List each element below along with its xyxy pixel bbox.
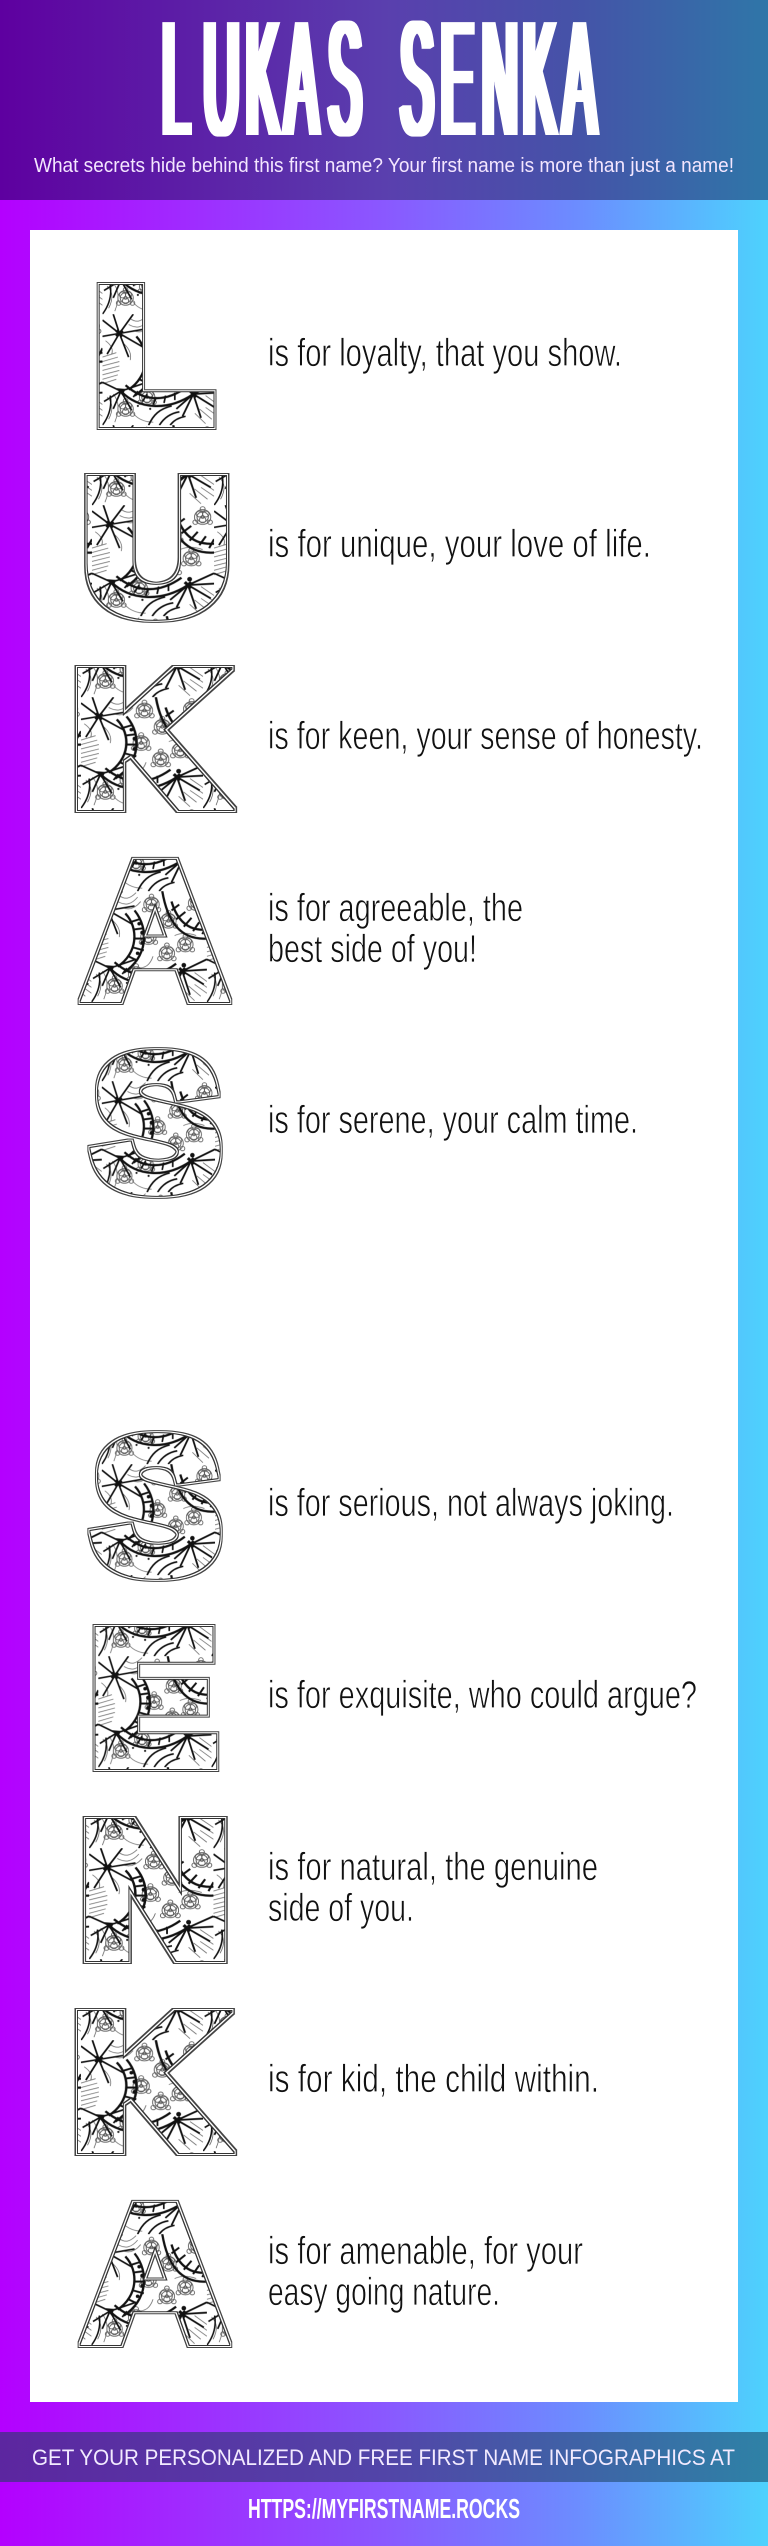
decorative letter A: A: [83, 824, 227, 1038]
row: S: [94, 1019, 638, 1227]
text: natural: [268, 1846, 598, 1930]
decorative letter K: K: [72, 636, 220, 843]
footer band: [0, 2432, 768, 2482]
decorative letter N: N: [80, 1785, 230, 1994]
text: loyalty: is for loyalty, that you show.: [268, 332, 622, 375]
row: E: [90, 1594, 697, 1802]
footer call to action: GET YOUR PERSONALIZED AND FREE FIRST NAME INFOGRAPHICS AT: [32, 2445, 735, 2470]
decorative letter E: E: [90, 1594, 217, 1802]
footer url: HTTPS://MYFIRSTNAME.ROCKS: [248, 2493, 520, 2524]
text: natural: side of you.: [268, 1887, 414, 1930]
text: amenable: easy going nature.: [268, 2271, 500, 2314]
row: U: [83, 444, 651, 651]
row: K: [72, 636, 703, 843]
row: A: [83, 824, 523, 1038]
text: amenable: [268, 2230, 583, 2314]
text: unique: is for unique, your love of life.: [268, 523, 651, 566]
text: agreeable: is for agreeable, the: [268, 887, 523, 930]
decorative letter S: S: [94, 1019, 220, 1227]
decorative letter K: K: [72, 1979, 220, 2186]
text: serene: is for serene, your calm time.: [268, 1099, 638, 1142]
white content panel: [30, 230, 738, 2402]
decorative letter S: S: [94, 1402, 220, 1610]
row: A second word: [83, 2167, 583, 2381]
decorative letter L: L: [94, 252, 212, 460]
text: amenable: is for amenable, for your: [268, 2230, 583, 2273]
row: K second word: [72, 1979, 599, 2186]
decorative letter A: A: [83, 2167, 227, 2381]
text: agreeable: best side of you!: [268, 928, 477, 971]
row: S second word: [94, 1402, 674, 1610]
row: N: [80, 1785, 598, 1994]
decorative letter U: U: [83, 444, 231, 651]
subtitle: What secrets hide behind this first name? Your first name is more than just a name!: [34, 155, 734, 177]
header band: [0, 0, 768, 200]
text: agreeable: [268, 887, 523, 971]
text: natural: is for natural, the genuine: [268, 1846, 598, 1889]
text: kid: is for kid, the child within.: [268, 2058, 599, 2101]
row: L: [94, 252, 622, 460]
